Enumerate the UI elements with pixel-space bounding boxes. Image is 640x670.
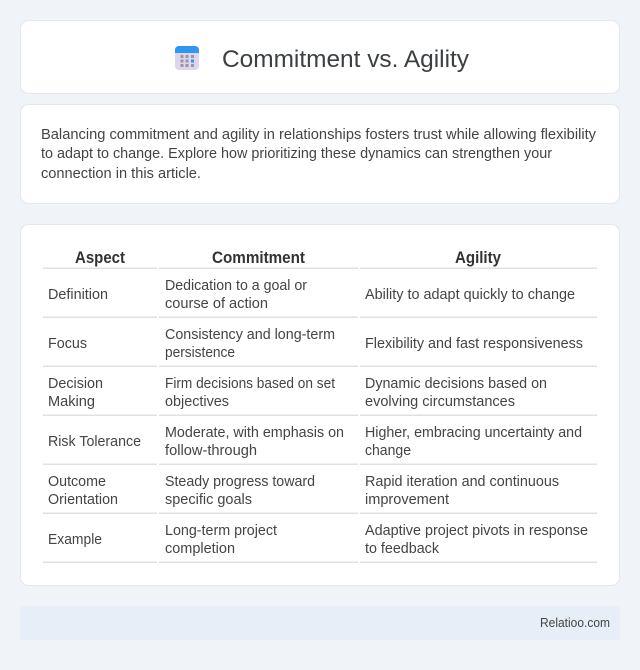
row: definition: Definition [48, 287, 108, 303]
panel: title card [20, 20, 620, 94]
row: definition [48, 278, 575, 312]
row: decision making: evolving circumstances [365, 394, 515, 410]
table header: Aspect [75, 249, 125, 267]
row: example: to feedback [365, 541, 440, 557]
row: focus: Consistency and long-term [165, 327, 335, 343]
row: example [48, 523, 588, 557]
row: outcome orientation: Rapid iteration and continuous [365, 474, 559, 490]
icon: calendar [175, 46, 199, 70]
row: outcome orientation: Steady progress toward [165, 474, 315, 490]
row: focus: Focus [48, 336, 87, 352]
intro text: connection in this article. [41, 166, 201, 182]
title: Commitment vs. Agility [222, 46, 470, 73]
row: decision making: Making [48, 394, 95, 410]
row: definition: course of action [165, 296, 268, 312]
row: outcome orientation: Orientation [48, 492, 118, 508]
panel: comparison table card [20, 224, 620, 586]
row: risk tolerance: Higher, embracing uncertainty and [365, 425, 582, 441]
row: decision making: Decision [48, 376, 103, 392]
row: outcome orientation: improvement [365, 492, 449, 508]
table header: Commitment [212, 249, 305, 267]
footer brand: Relatioo.com [540, 616, 610, 630]
table header: Agility [455, 249, 502, 267]
row: focus: Flexibility and fast responsiveness [365, 336, 583, 352]
row: outcome orientation: specific goals [165, 492, 252, 508]
intro text: to adapt to change. Explore how prioritizing these dynamics can strengthen your [41, 146, 552, 162]
intro text [41, 127, 597, 182]
row: risk tolerance [48, 425, 582, 459]
row: risk tolerance: Risk Tolerance [48, 434, 141, 450]
intro text: Balancing commitment and agility in relationships fosters trust while allowing flexibility [41, 127, 597, 143]
row: outcome orientation: Outcome [48, 474, 106, 490]
row: example: Adaptive project pivots in response [365, 523, 588, 539]
row: decision making [48, 376, 547, 410]
footer [20, 606, 620, 640]
row: outcome orientation [48, 474, 559, 508]
table rules [43, 268, 597, 563]
row: focus: persistence [165, 345, 235, 361]
row: example: Example [48, 532, 102, 548]
row: example: Long-term project [165, 523, 277, 539]
row: decision making: objectives [165, 394, 229, 410]
table header [75, 249, 502, 267]
row: risk tolerance: Moderate, with emphasis on [165, 425, 344, 441]
row: risk tolerance: follow-through [165, 443, 257, 459]
panel: intro card [20, 104, 620, 204]
row: example: completion [165, 541, 235, 557]
row: definition: Ability to adapt quickly to change [365, 287, 575, 303]
row: decision making: Dynamic decisions based on [365, 376, 547, 392]
row: decision making: Firm decisions based on set [165, 376, 335, 392]
row: definition: Dedication to a goal or [165, 278, 307, 294]
row: risk tolerance: change [365, 443, 411, 459]
row: focus [48, 327, 583, 361]
